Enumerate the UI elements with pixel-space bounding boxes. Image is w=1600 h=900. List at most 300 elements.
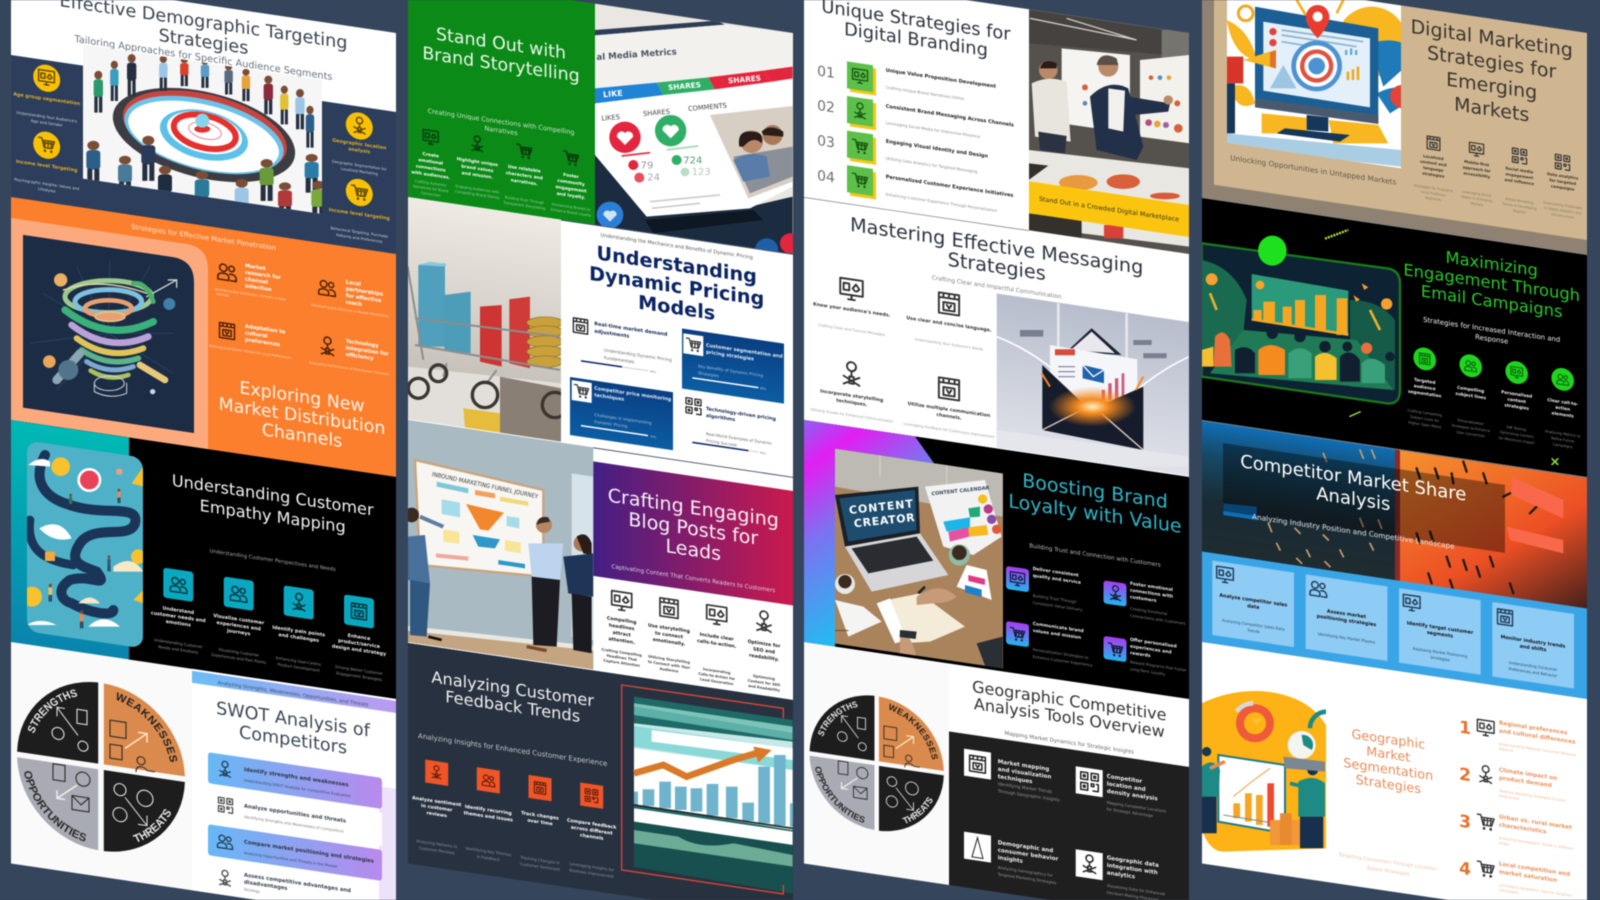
left card: age group segmentation: Age and Gender xyxy=(31,118,63,128)
item: market research: research for xyxy=(245,270,281,281)
left card: income targeting: Income level Targeting xyxy=(16,159,78,174)
tactic 3: Personalized xyxy=(1501,389,1532,400)
tool: competitor location: location and xyxy=(1107,781,1146,793)
step 3: Enhancing User-Centric xyxy=(276,655,321,667)
framed chart photo xyxy=(620,684,794,896)
step 4: Enhance xyxy=(348,633,371,642)
tactic 1: Subject Lines for xyxy=(1410,415,1440,423)
tip 3: Calls-to-Action for xyxy=(698,672,735,681)
item: brand values: Communicate brand xyxy=(1033,621,1084,634)
feature 3: Transparent Storytelling xyxy=(502,200,545,211)
feature 3: Use relatable xyxy=(508,164,541,175)
photo: presenter at boards xyxy=(1028,8,1190,255)
tool: demographic insights: Analyzing Demographics for xyxy=(998,865,1053,878)
segment 1 xyxy=(1459,715,1577,762)
feature 2: brand values xyxy=(461,164,494,174)
step 1 xyxy=(412,758,462,856)
right card: income targeting: Income level targeting xyxy=(329,207,390,222)
tip 3: Lead Generation xyxy=(700,677,734,686)
strategy 2: Leveraging Social xyxy=(1462,190,1491,198)
title: Brand Storytelling xyxy=(422,44,580,87)
item: local partnerships xyxy=(311,274,389,318)
step 1: Understanding Customer xyxy=(154,637,203,649)
step 3: Identify pain points xyxy=(272,625,325,639)
item: emotional connections: Foster emotional xyxy=(1130,581,1173,593)
card: customer segmentation xyxy=(682,329,784,404)
row 03: 03 xyxy=(817,133,835,152)
tactic 3: strategies xyxy=(1504,402,1529,412)
right card: geographic location: Localized Marketing xyxy=(341,167,378,176)
slide: Understanding Dynamic Pricing Models xyxy=(408,197,793,504)
subtitle: Strategies for Increased Interaction and xyxy=(1423,316,1560,344)
item: personalized rewards xyxy=(1104,633,1187,680)
card 1: data xyxy=(1247,603,1259,611)
left card: age group segmentation xyxy=(13,60,81,130)
title: Understanding xyxy=(596,241,757,288)
photo: team at funnel whiteboard: INBOUND MARKETING FUNNEL JOURNEY xyxy=(431,471,539,501)
card 1: Trends xyxy=(1246,627,1259,634)
right panel xyxy=(192,669,396,900)
step 1 xyxy=(151,566,206,656)
photo: glowing envelope xyxy=(996,293,1190,476)
top band xyxy=(192,671,396,713)
strategy 1: language xyxy=(1423,165,1444,173)
SWOT wheel: OPPORTUNITIES xyxy=(24,770,87,842)
step 2: experiences and xyxy=(217,620,261,633)
tip 1: Headlines That xyxy=(606,654,637,662)
tactic 4: action xyxy=(1555,405,1570,413)
feature 4: Foster xyxy=(563,172,580,180)
row 01: Crafting Unique Brand Narratives Online xyxy=(886,85,965,101)
title: Emerging xyxy=(1446,68,1537,104)
item: brand values: Enhance Customer Experience xyxy=(1033,654,1093,668)
tactic 4: Clear call-to- xyxy=(1547,397,1578,408)
segment 3 xyxy=(1459,809,1574,856)
feature 2 xyxy=(455,133,500,200)
tip 2: Utilizing Storytelling xyxy=(648,655,690,665)
card: customer segmentation: 95% xyxy=(760,386,767,391)
step 2: journeys xyxy=(226,628,250,637)
illustration: journey map xyxy=(22,437,146,649)
item: emotional connections: Connections with Customers xyxy=(1130,613,1186,626)
item: know audience: Know your audience's needs. xyxy=(813,301,891,319)
feature 2: Compelling Brand Stories xyxy=(455,189,500,200)
segment 1: Understanding Regional Consumer Behavior xyxy=(1499,742,1577,757)
step 2: themes and issues xyxy=(464,810,513,824)
header text: Strategies for Effective Market Penetration xyxy=(131,223,276,252)
title: Strategies xyxy=(1356,773,1421,797)
card 4: and shifts xyxy=(1520,644,1547,653)
row 01: Unique Value Proposition Development xyxy=(886,68,997,90)
step 2: in Feedback xyxy=(477,854,501,862)
illustration: audience around target xyxy=(82,46,323,214)
tactic 2 xyxy=(1451,352,1490,439)
item: multiple channels: Leveraging Feedback for Continuous Improvement xyxy=(903,422,995,439)
green panel xyxy=(408,0,595,225)
title: Channels xyxy=(262,420,342,452)
feature 1 xyxy=(411,128,450,199)
item: personalized rewards: Reward Programs that Foster xyxy=(1130,659,1187,673)
card 2 xyxy=(1306,574,1387,661)
tactic 2: subject lines xyxy=(1455,391,1486,401)
item: multiple channels xyxy=(903,372,995,439)
title: Market Distribution xyxy=(219,395,385,439)
card 4 xyxy=(1492,602,1574,689)
tool: demographic insights: Targeted Marketing Strategies xyxy=(997,871,1056,885)
slide: Competitor Market Share Analysis xyxy=(1202,397,1587,699)
segment 1: 1 xyxy=(1459,718,1471,739)
tactic 2: Strategies to Enhance xyxy=(1451,423,1490,433)
title: Exploring New xyxy=(239,378,365,417)
photo: content creator desk: CONTENT CALENDAR xyxy=(931,485,990,497)
feature 1: Crafting Authentic xyxy=(415,179,447,188)
card: competitor monitoring: 75% xyxy=(650,434,657,439)
feature 1: Connection xyxy=(421,191,441,198)
left card: age group segmentation: Understanding Your Audience's xyxy=(16,110,77,124)
navy band xyxy=(11,55,396,255)
item: consistent quality: Consistent Value Delivery xyxy=(1033,600,1083,612)
title: Analysis Tools Overview xyxy=(974,694,1165,741)
segment 2: product demand xyxy=(1499,775,1552,789)
left card: income targeting xyxy=(14,127,80,197)
SWOT wheel: WEAKNESSES xyxy=(888,703,938,760)
subtitle: Analyzing Insights for Enhanced Customer Experience xyxy=(418,731,607,768)
segment 4: 4 xyxy=(1459,859,1471,880)
step 2: Visualize customer xyxy=(213,613,265,627)
step 1: customer needs and xyxy=(151,610,206,624)
tool: competitor location xyxy=(1076,766,1166,820)
strategy 2: Mobile-first xyxy=(1464,159,1489,168)
item: market research: Identifying Key Distribution Partners in New xyxy=(214,287,286,302)
item: multiple channels: Utilize multiple communication xyxy=(908,401,990,419)
card 3: Assessing Market Positioning xyxy=(1413,646,1468,659)
step 2: Visualizing Customer xyxy=(218,647,260,658)
tactic 1: Higher Open Rates xyxy=(1408,421,1441,429)
card 1: Analyze competitor sales xyxy=(1219,593,1287,609)
title: Empathy Mapping xyxy=(200,496,346,537)
tip 3: Incorporating xyxy=(703,667,731,675)
gradient header xyxy=(593,461,793,605)
segment 4: market saturation xyxy=(1499,869,1557,884)
row 04: Enhancing Customer Experience Through Personalization xyxy=(886,192,998,213)
card 1 xyxy=(208,752,382,809)
feature 1: Create xyxy=(423,151,439,160)
title: Analyzing Customer xyxy=(431,668,594,711)
title: Models xyxy=(638,291,715,325)
slide background xyxy=(11,642,396,900)
item: multiple channels: channels. xyxy=(936,412,962,422)
tactic 3: for Maximum Impact xyxy=(1499,436,1535,445)
tip 3: calls-to-action. xyxy=(697,638,737,650)
tactic 1: Crafting Compelling xyxy=(1407,408,1442,418)
item: consistent quality: Building Trust Through xyxy=(1033,593,1077,604)
strategy 4: campaigns xyxy=(1551,183,1575,192)
item: market research: Market xyxy=(245,263,266,272)
item: cultural adaptation xyxy=(208,318,291,360)
card: competitor monitoring: Challenges in Implementing xyxy=(594,412,652,426)
title: Markets xyxy=(1454,93,1529,127)
strategy 4: Data analytics xyxy=(1547,171,1579,181)
strategy 3 xyxy=(1501,146,1536,216)
segment 2: Tailoring Marketing Strategies to Local xyxy=(1498,789,1566,803)
title: Dynamic Pricing xyxy=(589,262,764,311)
feature 3: characters and xyxy=(506,170,543,182)
item: personalized rewards: Offer personalized xyxy=(1130,637,1177,650)
left card: age group segmentation: Age group segmentation xyxy=(13,91,81,107)
card 1: Identify strengths and weaknesses xyxy=(244,767,349,788)
tip 4: and Readability xyxy=(748,684,781,693)
photo: social metrics dashboard: SHARES xyxy=(643,108,670,118)
tactic 3 xyxy=(1499,359,1535,445)
tip 4: Content for SEO xyxy=(748,679,780,687)
feature 3 xyxy=(502,142,545,211)
step 1: Understand xyxy=(163,605,195,616)
strategy 3: Trends in Developing xyxy=(1501,202,1536,211)
card: technology driven xyxy=(686,398,776,457)
strategy 1: content and xyxy=(1420,159,1447,168)
tan panel xyxy=(1214,0,1587,240)
right card: geographic location: Geographic location xyxy=(332,138,387,152)
segment 3: Analyzing Demographic Trends in Different xyxy=(1499,836,1574,851)
tool: market mapping: techniques xyxy=(998,774,1033,785)
item: market research: Markets xyxy=(216,292,229,298)
subtitle: Based Strategies xyxy=(1367,865,1410,878)
item: know audience xyxy=(813,274,891,338)
row 02 xyxy=(817,92,1014,151)
card 1 xyxy=(1212,561,1294,647)
row 03: Utilizing Data Analytics for Targeted Messaging xyxy=(886,156,978,174)
band text: Analyzing Strengths, Weaknesses, Opportunities, and Threats xyxy=(218,680,369,708)
card: real-time demand: Understanding Dynamic Pricing xyxy=(604,348,672,364)
column 3 of slides xyxy=(803,0,1190,900)
right card: income targeting: Patterns and Preferences xyxy=(336,233,383,244)
black background xyxy=(11,420,396,700)
subtitle: Analyzing Industry Position and Competitive Landscape xyxy=(1252,512,1455,551)
slide: Crafting Engaging Blog Posts for Leads xyxy=(404,419,793,731)
feature 1: Narratives for Brand xyxy=(413,184,448,193)
illustration: target on monitor xyxy=(1226,0,1402,169)
tactic 3: Optimizing Content xyxy=(1500,430,1534,439)
title: Crafting Engaging xyxy=(608,484,779,532)
step 3: over time xyxy=(527,818,553,827)
SWOT wheel: THREATS xyxy=(132,808,172,842)
photo: team at funnel whiteboard xyxy=(407,420,594,670)
item: market research: selection xyxy=(245,283,272,293)
title: Analysis xyxy=(1316,483,1390,515)
step 4: Engagement Strategies xyxy=(336,670,382,682)
step 1: reviews xyxy=(426,810,447,819)
strategy 3: and influence xyxy=(1504,177,1534,186)
card: technology driven: Real-World Examples of Dynamic xyxy=(706,431,772,446)
slide: Effective Demographic Targeting Strategies xyxy=(11,0,396,282)
feature 4: and loyalty. xyxy=(557,191,586,201)
tip 3: Include clear xyxy=(700,632,734,643)
step 4: Leveraging Insights for xyxy=(569,861,614,873)
step 3: Track changes xyxy=(521,810,559,822)
step 1: Needs and Emotions xyxy=(158,644,198,655)
row 04 xyxy=(817,161,1013,220)
tip 1: Crafting Compelling xyxy=(602,648,642,658)
tool: market mapping: Market mapping xyxy=(998,759,1049,773)
blue panel xyxy=(1202,420,1587,699)
photo: social metrics dashboard: SHARES xyxy=(668,80,701,92)
step 4 xyxy=(332,592,387,683)
card: customer segmentation: pricing strategies xyxy=(706,349,754,362)
black background xyxy=(804,420,1189,700)
item: emotional connections: connections with xyxy=(1130,587,1173,600)
left card: income targeting: Psychographic Insights: Values and xyxy=(14,177,80,191)
feature 3: narratives. xyxy=(511,177,538,187)
title: Leads xyxy=(666,534,721,565)
card 4: Assess competitive advantages and xyxy=(244,873,351,894)
item: technology integration xyxy=(309,333,389,376)
slide background xyxy=(11,0,396,255)
tip 1: headlines xyxy=(609,623,635,632)
slide: Analyzing Customer Feedback Trends xyxy=(408,628,793,900)
feature 1: connections xyxy=(416,163,446,174)
tool: data integration: analytics xyxy=(1107,870,1136,881)
tool: demographic insights xyxy=(964,832,1058,885)
segment 2 xyxy=(1459,762,1566,808)
item: know audience: Crafting Clear and Concise Messages xyxy=(818,323,885,337)
photo: social metrics dashboard xyxy=(567,0,820,354)
segment 3: 3 xyxy=(1459,812,1471,833)
strategy 4: for targeted xyxy=(1549,177,1576,186)
subtitle: Creating Unique Connections with Compelling xyxy=(428,107,574,137)
title: Understanding Customer xyxy=(172,471,374,520)
card 3 xyxy=(208,824,382,881)
tip 4: readability. xyxy=(749,653,779,663)
black background xyxy=(1202,197,1587,477)
feature 4: engagement xyxy=(555,184,587,195)
SWOT wheel xyxy=(16,681,186,852)
item: personalized rewards: rewards xyxy=(1130,650,1151,659)
item: storytelling: techniques. xyxy=(836,398,867,408)
item: brand values xyxy=(1006,617,1093,668)
tool: data integration: Geographic data xyxy=(1107,855,1159,869)
feature 1: emotional xyxy=(418,157,444,167)
step 2: Experiences and Pain Points xyxy=(211,652,266,665)
slide background xyxy=(804,0,1189,254)
item: market research: channel xyxy=(245,277,268,286)
step 2 xyxy=(211,575,266,665)
strategy 3: Regions xyxy=(1513,209,1526,215)
SWOT wheel: WEAKNESSES xyxy=(116,692,178,763)
slide: Geographic Market Segmentation Strategies xyxy=(1202,642,1587,900)
tactic 4: Analyzing Metrics to xyxy=(1545,429,1580,438)
photo: social metrics dashboard: 123 xyxy=(692,167,711,178)
strategy 1: Strategies for Engaging xyxy=(1414,183,1453,193)
slide: Maximizing Engagement Through Email Campaigns xyxy=(1201,197,1588,478)
slide background xyxy=(408,643,793,900)
feature 4: Humanizing Brands to xyxy=(552,202,590,212)
slide background xyxy=(1202,642,1587,900)
tactic 2: Personalization xyxy=(1457,418,1484,426)
card: competitor monitoring: Dynamic Pricing xyxy=(594,419,628,429)
item: cultural adaptation: cultural xyxy=(245,330,268,340)
slide background xyxy=(804,197,1189,477)
lavender edge xyxy=(379,786,396,900)
tool: market mapping: Identifying Market Trends xyxy=(998,781,1053,795)
tool: demographic insights: insights xyxy=(998,855,1023,865)
tool: data integration: Visualizing Data for Enhanced xyxy=(1107,883,1165,896)
card 2: Assess market xyxy=(1327,609,1367,620)
tactic 4: Refine Future xyxy=(1551,436,1574,444)
item: market research xyxy=(214,259,286,306)
slide: Stand Out with Brand Storytelling xyxy=(408,0,794,254)
photo: content creator desk xyxy=(834,448,1004,669)
tip 3 xyxy=(697,603,737,687)
strategy 3: Social media xyxy=(1505,165,1534,175)
card 3 xyxy=(1399,588,1481,675)
title: Maximizing xyxy=(1446,248,1538,280)
item: technology integration: Technology xyxy=(346,339,379,349)
white header xyxy=(949,663,1189,767)
SWOT wheel: STRENGTHS xyxy=(817,700,858,737)
row 02: Leveraging Social Media for Distinctive Presence xyxy=(886,120,981,139)
segment 4: Campaigns xyxy=(1499,888,1519,895)
feature 2: and mission. xyxy=(462,170,493,181)
white panel xyxy=(408,420,793,700)
segment 2: Climate impact on xyxy=(1499,767,1557,782)
step 1: in customer xyxy=(421,803,453,814)
card: technology driven: algorithms xyxy=(706,413,735,423)
item: cultural adaptation: Adaptation to xyxy=(245,324,286,336)
title: Strategies xyxy=(159,26,248,59)
title: Digital Marketing xyxy=(1411,15,1573,62)
item: local partnerships: for effective xyxy=(346,293,382,304)
card 3: Analyzing Opportunities and Threats in the Market xyxy=(244,851,338,869)
card: competitor monitoring xyxy=(570,377,673,450)
strategy 3: Mobile Marketing xyxy=(1505,197,1533,205)
subtitle: Narratives xyxy=(484,124,518,137)
tip 4: SEO and xyxy=(753,646,775,656)
step 4: product/service xyxy=(338,638,381,650)
illustration: marketing funnel xyxy=(22,234,195,434)
SWOT wheel: THREATS xyxy=(902,796,934,824)
step 4: Compare feedback xyxy=(567,818,617,831)
item: emotional connections: Creating Emotional xyxy=(1130,606,1167,616)
tool: competitor location: Competitor xyxy=(1107,774,1142,785)
card 2: Analyze opportunities and threats xyxy=(244,804,346,825)
card: real-time demand: adjustments xyxy=(594,329,629,340)
step 1: Customer Reviews xyxy=(419,845,455,855)
strategy 2: approach for xyxy=(1463,164,1491,174)
dark panel xyxy=(949,731,1189,900)
row 02: 02 xyxy=(817,98,835,117)
tool: demographic insights: consumer behavior xyxy=(998,848,1058,863)
card 4 xyxy=(220,869,351,900)
illustration: analysts with chart xyxy=(1201,690,1327,852)
photo: social metrics dashboard: 724 xyxy=(683,155,702,166)
segment 2: 2 xyxy=(1459,765,1471,786)
feature 1: with audiences. xyxy=(411,169,450,181)
strategy 2: Media in Emerging xyxy=(1461,195,1492,203)
tactic 1 xyxy=(1407,345,1442,430)
top rule xyxy=(561,220,793,255)
tactic 4: Campaigns xyxy=(1553,442,1573,449)
card: real-time demand: 60% xyxy=(650,369,657,374)
step 3 xyxy=(272,584,325,674)
feature 4: Enhance Brand Loyalty xyxy=(551,208,591,218)
SWOT wheel: OPPORTUNITIES xyxy=(814,766,866,824)
strategy 1: strategies xyxy=(1422,171,1445,179)
tool: market mapping: Through Geographic Insights xyxy=(997,788,1060,804)
item: consistent quality: Deliver consistent xyxy=(1033,566,1080,579)
row 03: Engaging Visual Identity and Design xyxy=(886,139,988,160)
dark title band xyxy=(1223,443,1505,553)
title: Digital Branding xyxy=(844,19,988,61)
